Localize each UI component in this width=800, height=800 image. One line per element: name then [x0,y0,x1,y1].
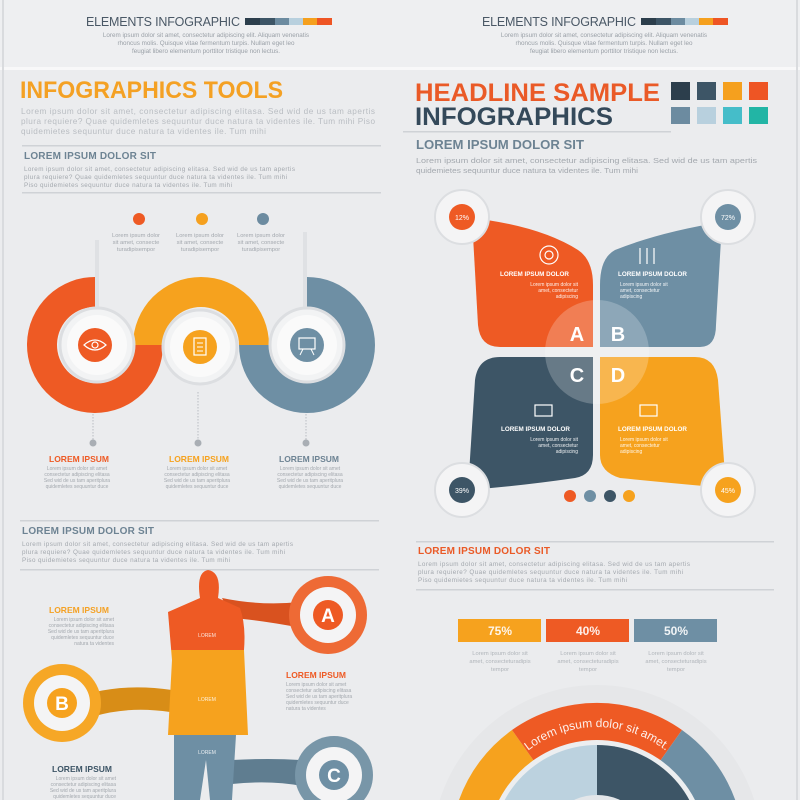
percent bars: tempor [579,667,597,673]
quadrant chart: Lorem ipsum dolor sit [530,282,579,288]
quadrant chart: Lorem ipsum dolor sit [620,437,668,443]
quadrant chart: LOREM IPSUM DOLOR [501,426,570,433]
person chart [23,565,373,800]
circle C [295,736,373,800]
wave chart: Lorem ipsum dolor [112,233,160,239]
person chart: consectetur adipiscing elitasa [51,782,116,788]
quadrant chart: Lorem ipsum dolor sit [530,437,579,443]
heading left 1: Piso quidemietes sequuntur duce natura ta videntes ile. Tum mihi [24,182,232,189]
wave chart: quidemletes sequuntur duce [46,484,109,490]
heading left 2: plura requiere? Quae quidemletes sequuntur duce natura ta videntes ile. Tum mihi [22,549,285,556]
heading right 1: Lorem ipsum dolor sit amet, consectetur adipiscing elitasa. Sed wid de us tam apertis [416,156,757,165]
person chart: LOREM [198,697,216,703]
heading left 1: Lorem ipsum dolor sit amet, consectetur adipiscing elitasa. Sed wid de us tam apertis [24,166,295,173]
quadrant chart: Lorem ipsum dolor sit [620,282,668,288]
wave chart: Lorem ipsum dolor [176,233,224,239]
icon: board [290,328,324,362]
quadrant chart: amet, consectetur [538,288,578,294]
header left: ELEMENTS INFOGRAPHIC [86,15,240,29]
wave chart: LOREM IPSUM [49,454,109,464]
person chart: Sed wid de us tam aperitplura [48,629,114,635]
heading right 2: Piso quidemietes sequuntur duce natura ta videntes ile. Tum mihi [418,577,627,584]
person chart: LOREM [198,750,216,756]
percent bars: 75% [488,624,512,638]
wave chart: sit amet, consecte [177,240,223,246]
donut chart [459,702,736,800]
heading left 2: LOREM IPSUM DOLOR SIT [22,526,154,537]
wave chart: turadipisempor [242,247,280,253]
heading left 2: Piso quidemietes sequuntur duce natura ta videntes ile. Tum mihi [22,557,230,564]
title: headline sample: INFOGRAPHICS [415,103,613,131]
quadrant chart [435,190,755,517]
intro paragraph left [21,107,375,136]
quadrant chart: adipiscing [620,294,642,300]
quadrant chart: adipiscing [620,449,642,455]
header left [86,15,332,55]
title: headline sample [416,83,659,125]
heading left 1: LOREM IPSUM DOLOR SIT [24,151,156,162]
quadrant chart: 72% [721,215,735,222]
percent bars: 50% [664,624,688,638]
wave chart: Sed wid de us tam aperitplura [44,478,110,484]
circle B: B [55,694,69,715]
person chart: quidemletes sequuntur duce [286,700,349,706]
header left: rhoncus molis. Quisque vitae fermentum turpis. Nullam eget leo [117,40,295,47]
heading right 1 [416,138,757,175]
quadrant chart: LOREM IPSUM DOLOR [618,271,687,278]
wave chart: Lorem ipsum dolor sit amet [47,466,108,472]
donut chart: Lorem ipsum dolor sit amet. [524,718,667,750]
person chart: Lorem ipsum dolor sit amet [286,682,347,688]
header right: ELEMENTS INFOGRAPHIC [482,15,636,29]
heading left 2: Lorem ipsum dolor sit amet, consectetur adipiscing elitasa. Sed wid de us tam apertis [22,541,293,548]
person chart: Sed wid de us tam aperitplura [50,788,116,794]
percent bars: Lorem ipsum dolor sit [648,651,704,657]
intro paragraph left: Lorem ipsum dolor sit amet, consectetur adipiscing elitasa. Sed wid de us tam apertis [21,107,375,116]
intro paragraph left: plura requiere? Quae quidemletes sequuntur duce natura ta videntes ile. Tum mihi Piso [21,117,375,126]
person chart: Lorem ipsum dolor sit amet [56,776,117,782]
percent bars: tempor [491,667,509,673]
percent bars: Lorem ipsum dolor sit [560,651,616,657]
header left: feugiat libero elementum porttitor tristique non lectus. [132,48,280,55]
person chart: natura ta videntes [286,706,326,712]
intro paragraph left: quidemietes sequuntur duce natura ta videntes ile. Tum mihi [21,127,266,136]
person chart: LOREM [198,633,216,639]
person chart: quidemletes sequuntur duce [51,635,114,641]
person chart: Sed wid de us tam aperitplura [286,694,352,700]
percent bars: Lorem ipsum dolor sit [472,651,528,657]
heading right 1: quidemietes sequuntur duce natura ta videntes ile. Tum mihi [416,166,638,175]
person chart: Lorem ipsum dolor sit amet [54,617,115,623]
person chart: quidemletes sequuntur duce [53,794,116,800]
person chart: LOREM IPSUM [52,764,112,774]
quadrant chart: LOREM IPSUM DOLOR [500,271,569,278]
wave chart: consectetur adipiscing elitasa [164,472,230,478]
color swatches [671,82,768,124]
heading right 2 [418,546,690,584]
circle C: C [327,766,341,787]
wave chart: Lorem ipsum dolor sit amet [280,466,341,472]
wave chart: sit amet, consecte [113,240,159,246]
wave chart: turadipisempor [117,247,155,253]
quadrant chart: C [570,365,584,387]
wave chart: consectetur adipiscing elitasa [277,472,343,478]
percent bars: tempor [667,667,685,673]
header left: Lorem ipsum dolor sit amet, consectetur adipiscing elit. Aliquam venenatis [103,32,309,39]
circle B [23,664,101,742]
percent bars [458,619,717,673]
heading right 2: LOREM IPSUM DOLOR SIT [418,546,550,557]
header right [482,15,728,55]
wave chart: Sed wid de us tam aperitplura [277,478,343,484]
person chart: natura ta videntes [74,641,114,647]
wave chart: turadipisempor [181,247,219,253]
heading left 1 [24,151,295,189]
quadrant chart: D [611,365,625,387]
wave chart: Lorem ipsum dolor [237,233,285,239]
quadrant chart: amet, consectetur [620,443,660,449]
wave chart: quidemletes sequuntur duce [166,484,229,490]
quadrant chart: amet, consectetur [538,443,578,449]
wave chart: LOREM IPSUM [169,454,229,464]
title: headline sample: HEADLINE SAMPLE [415,79,660,107]
wave chart: consectetur adipiscing elitasa [44,472,110,478]
wave chart: Lorem ipsum dolor sit amet [167,466,228,472]
wave chart: quidemletes sequuntur duce [279,484,342,490]
header right: Lorem ipsum dolor sit amet, consectetur adipiscing elit. Aliquam venenatis [501,32,707,39]
heading left 2 [22,526,293,564]
title: infographics tools: INFOGRAPHICS TOOLS [20,77,283,104]
wave chart [27,213,375,490]
wave chart: LOREM IPSUM [279,454,339,464]
percent bars: amet, consecteturadipis [469,659,531,665]
quadrant chart: B [611,324,625,346]
heading right 1: LOREM IPSUM DOLOR SIT [416,138,584,152]
person chart: LOREM IPSUM [286,670,346,680]
person chart: consectetur adipiscing elitasa [49,623,114,629]
icon: eye [78,328,112,362]
circle A: A [321,606,335,627]
icons in quadrants [535,246,657,416]
person chart: consectetur adipiscing elitasa [286,688,352,694]
quadrant chart: LOREM IPSUM DOLOR [618,426,687,433]
heading right 2: Lorem ipsum dolor sit amet, consectetur adipiscing elitasa. Sed wid de us tam apertis [418,561,690,568]
percent bars: amet, consecteturadipis [645,659,707,665]
quadrant chart: 45% [721,488,735,495]
percent bars: 40% [576,624,600,638]
heading right 2: plura requiere? Quae quidemletes sequuntur duce natura ta videntes ile. Tum mihi [418,569,683,576]
wave chart: Sed wid de us tam aperitplura [164,478,230,484]
header right: feugiat libero elementum porttitor tristique non lectus. [530,48,678,55]
percent bars: amet, consecteturadipis [557,659,619,665]
quadrant chart: amet, consectetur [620,288,660,294]
quadrant chart: 39% [455,488,469,495]
quadrant chart: adipiscing [556,294,578,300]
person chart: LOREM IPSUM [49,605,109,615]
wave chart: sit amet, consecte [238,240,284,246]
quadrant chart: adipiscing [556,449,578,455]
header right: rhoncus molis. Quisque vitae fermentum turpis. Nullam eget leo [515,40,693,47]
quadrant chart: A [570,324,584,346]
circle A [289,576,367,654]
icon: clipboard [183,330,217,364]
heading left 1: plura requiere? Quae quidemletes sequuntur duce natura ta videntes ile. Tum mihi [24,174,287,181]
quadrant chart: 12% [455,215,469,222]
